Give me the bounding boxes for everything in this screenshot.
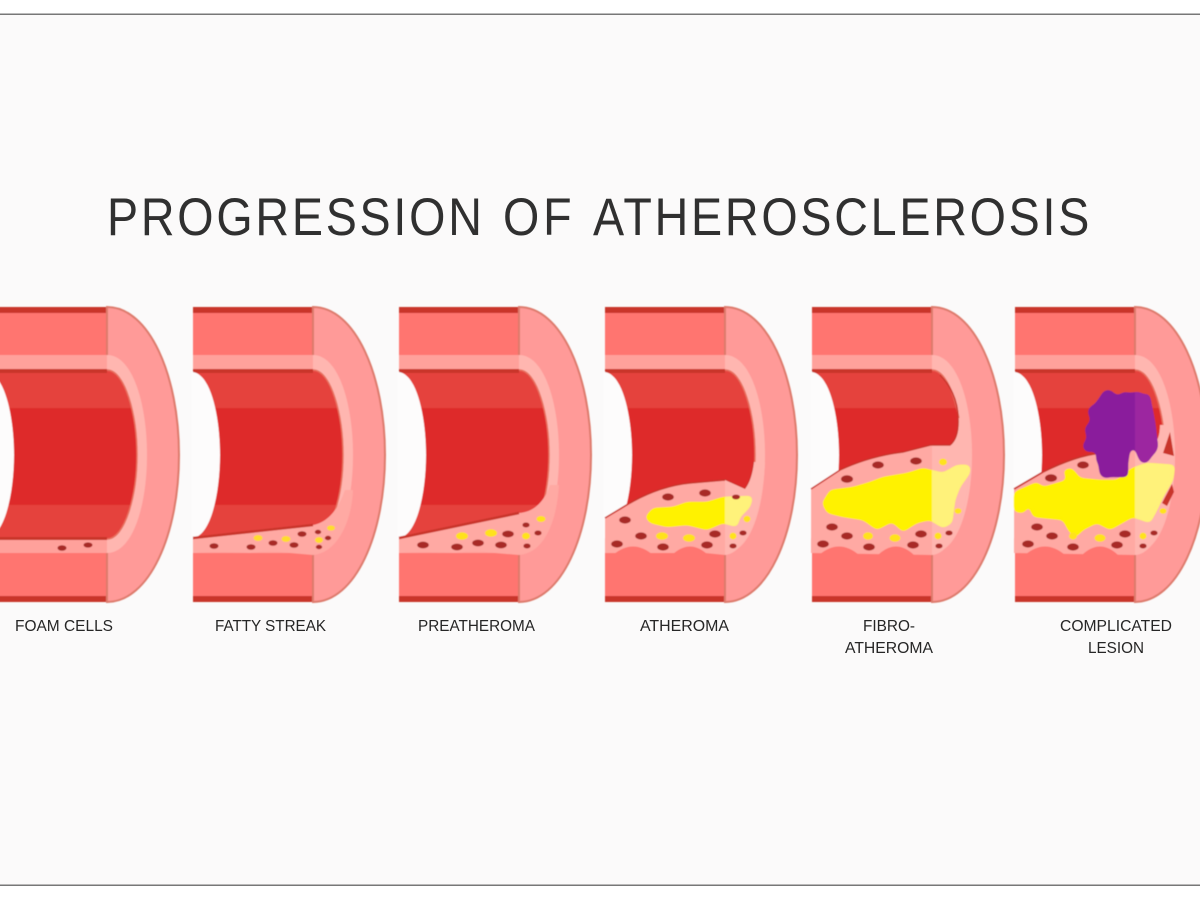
- panel: fibroatheroma: [810, 307, 1004, 602]
- lipid core: [822, 465, 970, 532]
- plaque: [193, 490, 353, 555]
- label: complicated lesion: [1060, 618, 1172, 657]
- panel: atheroma: [603, 307, 797, 602]
- label: fibro-atheroma: ATHEROMA: [845, 640, 934, 657]
- cell dots: [611, 489, 747, 551]
- lipid core: [645, 496, 753, 530]
- label: complicated lesion: COMPLICATED: [1060, 618, 1172, 635]
- title: OF: [503, 187, 572, 247]
- title: ATHEROSCLEROSIS: [593, 187, 1089, 247]
- panel: foam cells: [0, 307, 179, 602]
- plaque: [1014, 425, 1173, 555]
- panel: preatheroma: [397, 307, 591, 602]
- label: foam cells: FOAM CELLS: [15, 618, 113, 635]
- foam cell dots: [58, 542, 92, 551]
- cell dots: [417, 522, 542, 550]
- wall bumps under plaque: [613, 546, 708, 555]
- label: fibro-atheroma: FIBRO-: [863, 618, 915, 635]
- lipid dots: [1069, 508, 1166, 542]
- lipid core: [1014, 463, 1175, 538]
- cell dots: [1022, 461, 1158, 551]
- lipid dots: [254, 525, 335, 543]
- plaque: [399, 485, 559, 555]
- panel: fatty streak: [191, 307, 385, 602]
- lipid dots: [456, 516, 546, 540]
- plaque: [605, 462, 765, 555]
- wall bumps under plaque: [819, 546, 914, 555]
- title: PROGRESSION: [107, 187, 482, 247]
- thrombus: [1083, 390, 1158, 478]
- lipid dots: [656, 516, 750, 542]
- panel: complicated lesion: [1013, 307, 1200, 602]
- label: complicated lesion: LESION: [1088, 640, 1144, 657]
- plaque: [811, 418, 970, 555]
- label: fatty streak: FATTY STREAK: [215, 618, 327, 635]
- cell dots: [210, 530, 331, 550]
- wall bumps under plaque: [1025, 546, 1118, 555]
- lipid dots: [863, 459, 962, 542]
- label: preatheroma: PREATHEROMA: [418, 618, 536, 635]
- label: atheroma: ATHEROMA: [640, 618, 730, 635]
- ruptured red lesions: [1162, 432, 1174, 506]
- cell dots: [817, 457, 953, 551]
- label: fibro-atheroma: [845, 618, 934, 657]
- title: [107, 187, 1089, 247]
